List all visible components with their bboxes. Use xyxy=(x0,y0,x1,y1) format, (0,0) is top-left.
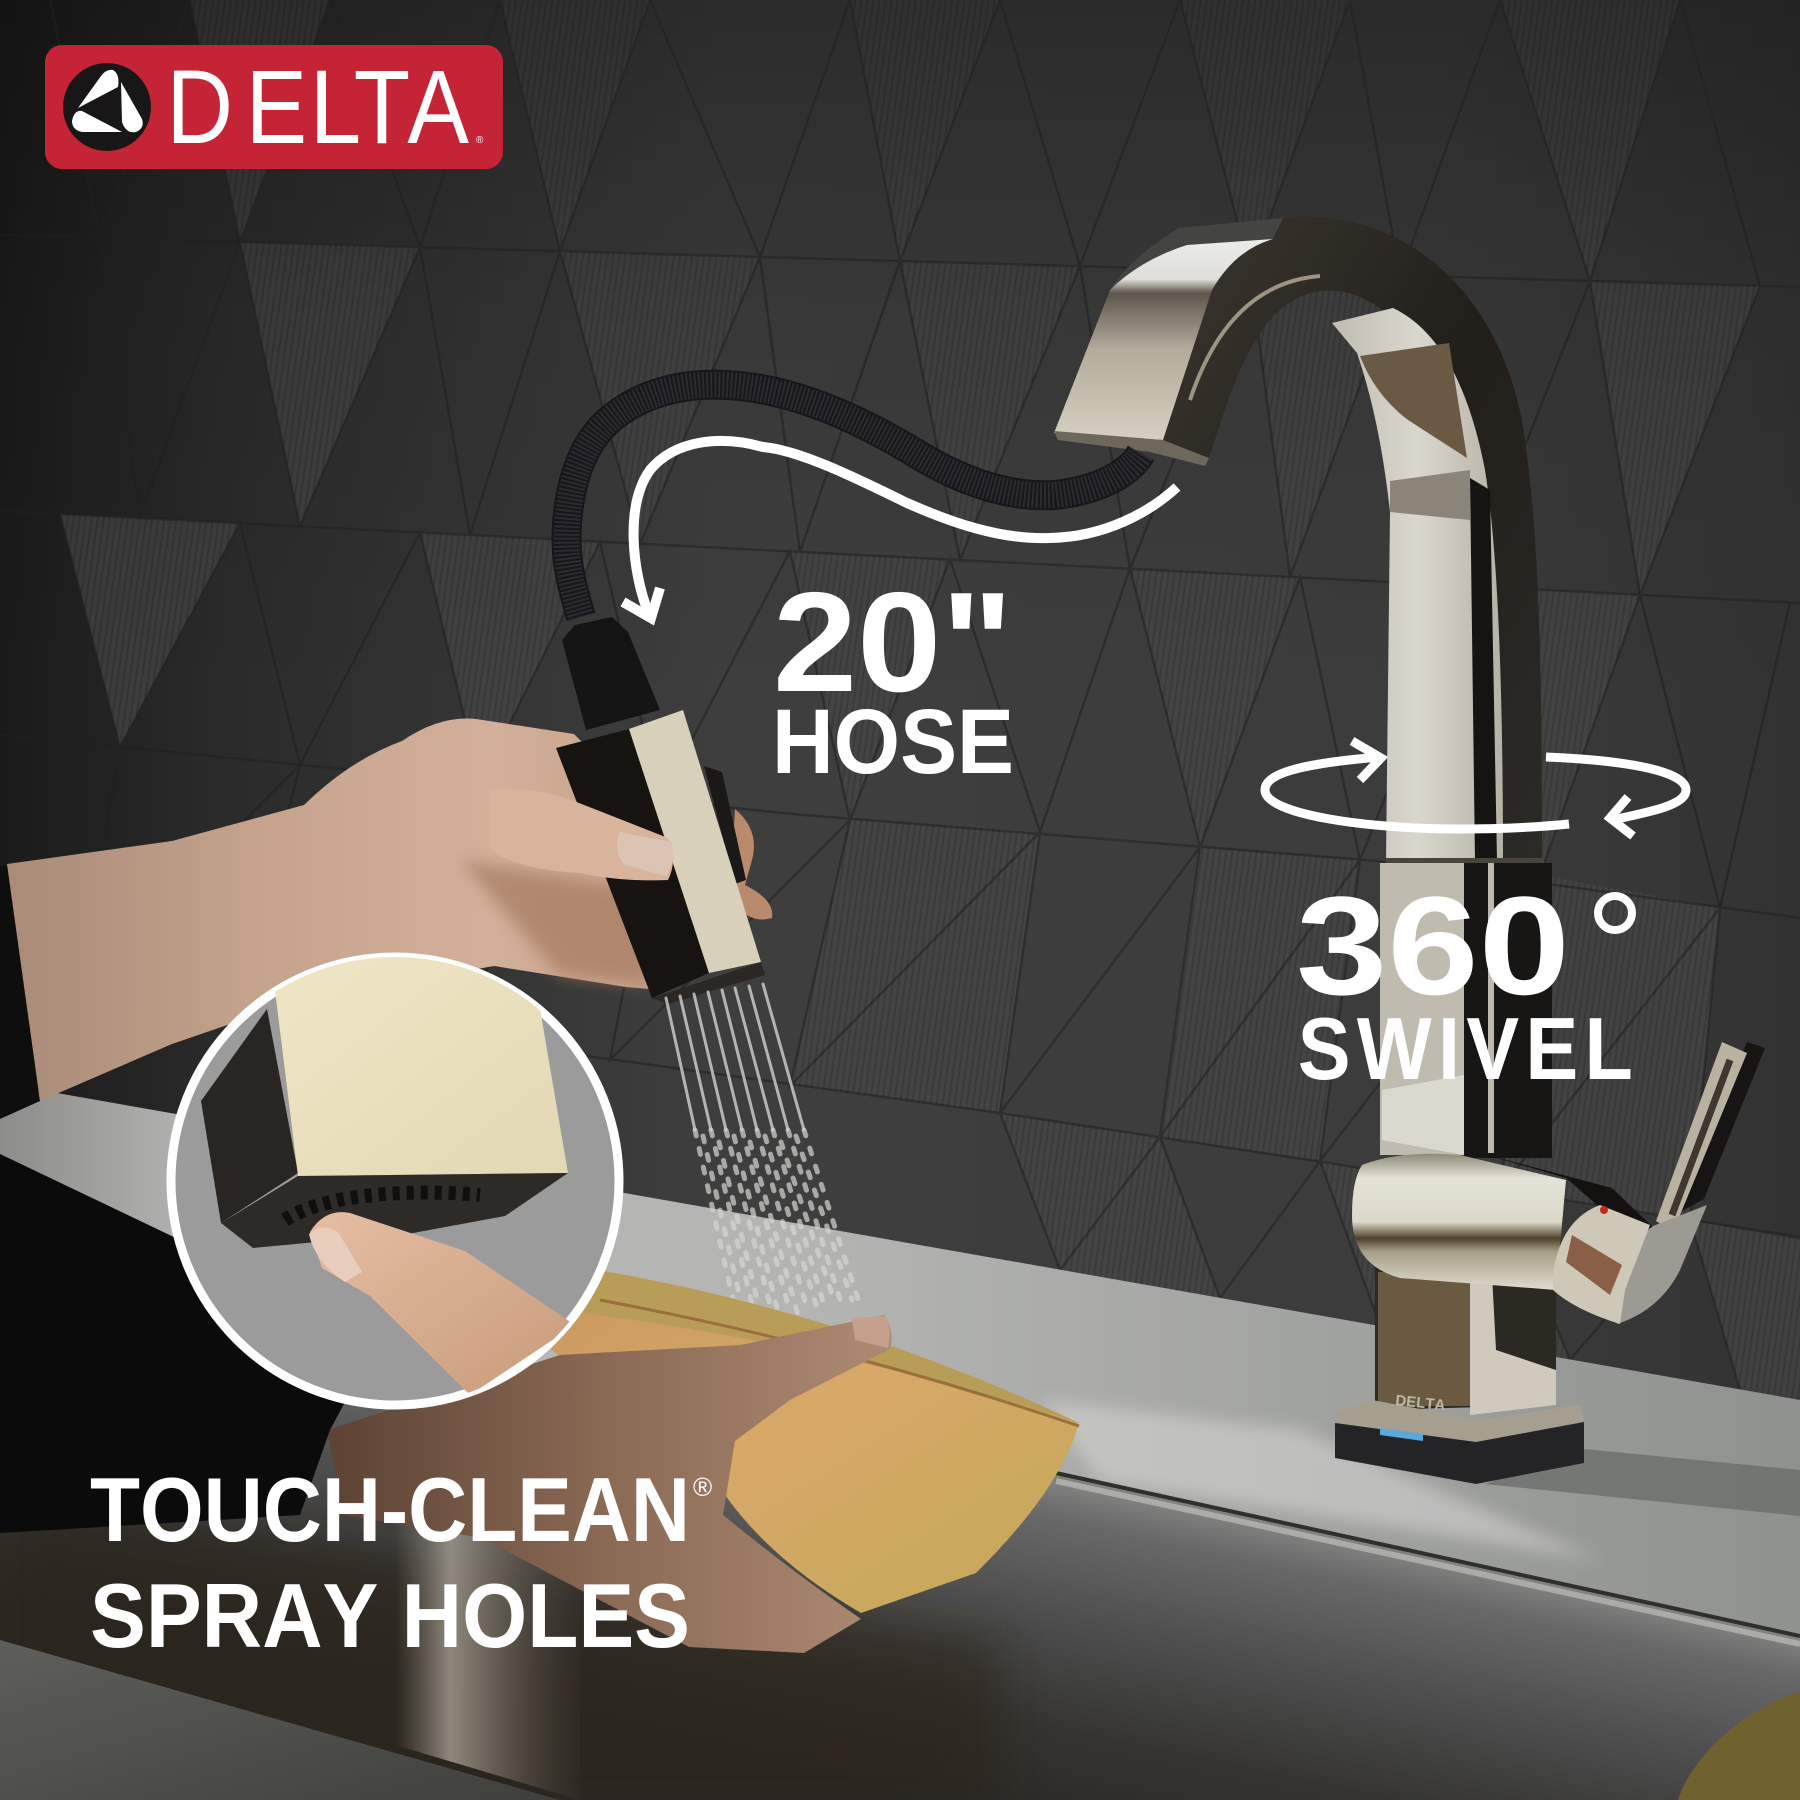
blue LED xyxy=(1380,1428,1423,1441)
hose arrow xyxy=(623,441,1177,618)
logo wordmark: DELTA xyxy=(166,47,469,165)
faucet arch back xyxy=(1153,217,1542,861)
logo badge xyxy=(45,45,503,169)
column seam xyxy=(1386,858,1544,863)
degree sign xyxy=(1598,896,1632,930)
brown reflection xyxy=(1360,343,1467,458)
touch-clean label: SPRAY HOLES xyxy=(90,1566,690,1667)
thumbnail xyxy=(617,832,673,876)
sprayer neck xyxy=(562,617,660,730)
water spray xyxy=(666,984,861,1320)
finger tips behind xyxy=(730,809,772,920)
thumb over sprayer xyxy=(490,789,673,880)
lower column highlight xyxy=(1488,863,1494,1153)
swivel label: 360 xyxy=(1296,867,1570,1024)
inner arch highlight xyxy=(1190,276,1320,400)
lower column xyxy=(1380,863,1466,1155)
lower left counter xyxy=(0,1640,560,1800)
bowl xyxy=(540,1269,1079,1613)
background wall xyxy=(0,0,1800,1420)
inset circle: touch-clean spray holes xyxy=(171,950,619,1405)
touch-clean label xyxy=(90,1460,712,1667)
handle shadow xyxy=(1480,1153,1658,1232)
counter front edge highlight xyxy=(1056,1481,1800,1644)
tile joint lines xyxy=(0,0,1800,1390)
textured wall tiles xyxy=(60,0,1800,1400)
stainless sink wall xyxy=(395,1520,580,1800)
counter light streak xyxy=(1040,1400,1600,1560)
upper sleeve xyxy=(0,866,40,1119)
sprayer light face xyxy=(629,710,761,973)
hose length label xyxy=(772,563,1014,793)
spout front face xyxy=(1054,239,1273,440)
faucet shadow on counter xyxy=(1485,1449,1800,1516)
handle paddle xyxy=(1610,1205,1707,1324)
inner lit face xyxy=(1332,308,1503,861)
black rear lever xyxy=(1675,1042,1765,1215)
base column light edge xyxy=(1470,1275,1556,1415)
lower hand xyxy=(327,1315,892,1653)
sprayer dark face xyxy=(556,729,709,998)
touch-clean label: TOUCH-CLEAN xyxy=(90,1460,690,1561)
spout rim xyxy=(1054,431,1209,466)
hose length label: 20" xyxy=(773,563,1013,722)
lower column dark side xyxy=(1464,863,1552,1158)
yellow bowl corner xyxy=(1678,1692,1800,1800)
copper reflection xyxy=(1566,1235,1622,1295)
inset finger xyxy=(310,1212,575,1395)
palm and forearm xyxy=(7,718,700,1101)
inset sprayer dark face xyxy=(201,1009,298,1223)
inset fingernail xyxy=(309,1227,362,1282)
faucet logo: DELTA xyxy=(1395,1392,1446,1414)
spout top shade xyxy=(1110,218,1283,290)
left basin shade xyxy=(0,1500,1000,1800)
swivel label xyxy=(1296,867,1639,1098)
inset sprayer cream face xyxy=(270,950,568,1176)
sink basin xyxy=(0,1290,1800,1800)
sprayer button xyxy=(704,766,746,884)
sprayer nozzle xyxy=(652,962,765,1004)
bowl rim line xyxy=(600,1300,1079,1426)
logo xyxy=(45,45,503,169)
lower sleeve xyxy=(0,1154,400,1533)
countertop xyxy=(0,1083,1800,1636)
swivel label: SWIVEL xyxy=(1298,999,1639,1098)
hose length label: HOSE xyxy=(772,691,1014,793)
inset sprayer bottom xyxy=(221,1173,568,1248)
base column xyxy=(1375,1267,1556,1410)
base column brown face xyxy=(1378,1272,1470,1406)
logo registered mark: ® xyxy=(476,135,484,146)
lever dark line xyxy=(1672,1060,1730,1215)
grey reflection band xyxy=(1390,470,1470,520)
inset spray holes xyxy=(285,1193,480,1220)
bowl inner rim xyxy=(560,1269,1079,1423)
dark column strip xyxy=(1470,478,1497,861)
braided hose xyxy=(567,385,1141,617)
base trim plate xyxy=(1337,1400,1584,1444)
raised arm and hand xyxy=(0,718,772,1119)
handle hub xyxy=(1553,1205,1650,1324)
swivel arrows xyxy=(1265,741,1686,836)
cylinder body xyxy=(1352,1154,1566,1290)
palm crease shade xyxy=(460,860,650,985)
faucet xyxy=(1054,217,1765,1484)
counter front edge groove xyxy=(1056,1473,1800,1636)
logo emblem xyxy=(63,63,151,151)
touch-clean label: ® xyxy=(693,1472,712,1502)
lower column glare xyxy=(1382,1075,1464,1155)
sprayer head xyxy=(556,710,765,1004)
lower hand thumbnail xyxy=(852,1316,890,1348)
black base xyxy=(1335,1422,1584,1484)
red indicator xyxy=(1600,1206,1608,1214)
lever xyxy=(1656,1042,1747,1232)
